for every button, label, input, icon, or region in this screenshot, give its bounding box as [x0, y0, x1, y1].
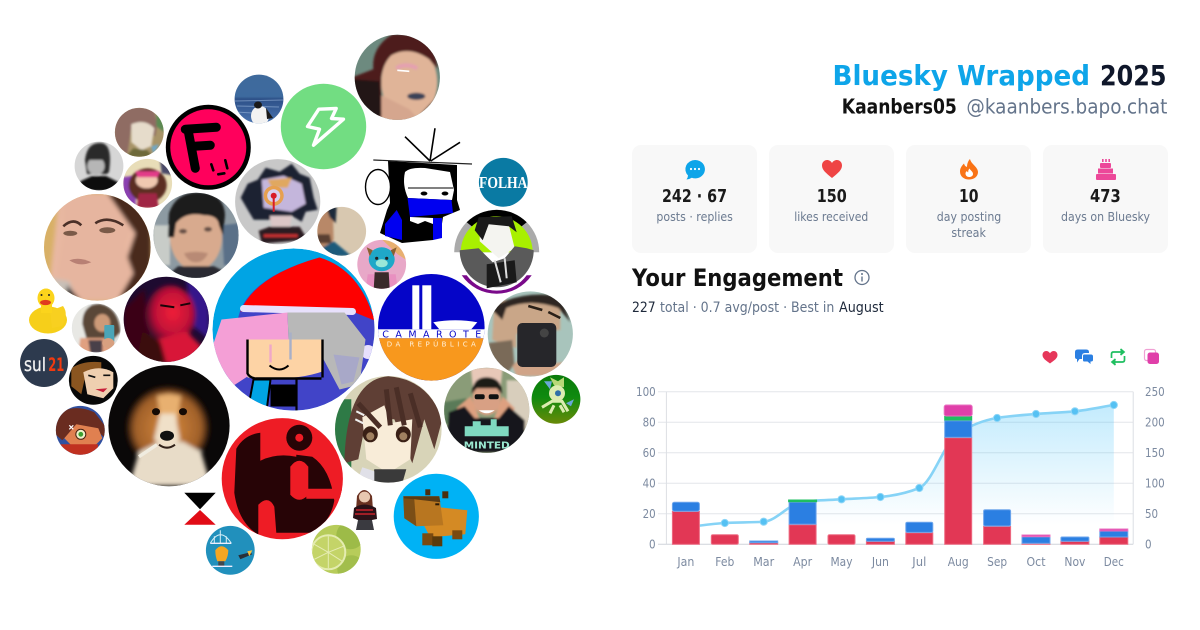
icon: birthday cake — [1096, 159, 1116, 180]
avatar: lime slices — [312, 524, 361, 574]
panel: days on Bluesky stat: 473 — [1090, 186, 1121, 207]
avatar: snoopy at sea — [234, 74, 284, 126]
avatar: Camarote da Republica logo: DA REPÚBLICA — [387, 340, 476, 349]
left axis labels — [636, 385, 656, 551]
left axis labels: 20 — [643, 507, 656, 521]
icon: likes — [1042, 351, 1058, 364]
month labels: Jan — [676, 555, 694, 569]
avatar: Folha logo — [479, 158, 528, 207]
icon: replies — [1075, 350, 1093, 364]
avatar: man with child on shoulders, MINTED shirt: MINTED — [464, 440, 510, 451]
avatar: celebi sprite — [531, 374, 581, 424]
avatar: pink F logo — [166, 105, 251, 190]
right axis labels: 100 — [1145, 476, 1165, 490]
avatar: sul21 logo — [20, 339, 68, 387]
avatar: girl with green eye — [55, 405, 105, 455]
avatar: man with child on shoulders, MINTED shirt — [444, 367, 532, 453]
left axis labels: 0 — [649, 537, 656, 551]
avatar: woman with dark lipstick — [354, 34, 440, 120]
avatar: red logo with black letters — [221, 418, 343, 540]
avatar: black and white portrait — [74, 141, 124, 191]
icon: flame — [960, 159, 978, 180]
avatar: hand-drawn masked figure — [366, 128, 472, 243]
avatar: blue tiger character — [357, 239, 407, 289]
right axis labels: 150 — [1145, 446, 1165, 460]
avatar: anime brown hair — [114, 107, 164, 157]
user handle line: @kaanbers.bapo.chat — [966, 94, 1168, 118]
avatar: mirror selfie — [71, 303, 121, 353]
left axis labels: 80 — [643, 415, 656, 429]
icon: quotes — [1144, 350, 1159, 364]
panel: likes received stat: likes received — [794, 209, 868, 224]
month labels: Jun — [871, 555, 889, 569]
avatar: manga girl on lime background — [454, 210, 539, 295]
avatar: woman in red light — [123, 276, 209, 364]
avatar: young man — [153, 192, 239, 280]
user handle line: Kaanbers05 — [842, 94, 957, 118]
month labels: Feb — [715, 555, 734, 569]
month labels — [676, 555, 1124, 569]
avatar: sul21 logo: 21 — [48, 354, 64, 376]
avatar: sheltie dog with cigarette — [108, 365, 230, 487]
left axis labels: 60 — [643, 446, 656, 460]
avatar: rubber duck — [29, 288, 67, 334]
panel: day posting streak stat: streak — [951, 225, 987, 240]
heading: Your Engagement: Your Engagement — [631, 264, 843, 292]
avatar: woman close-up — [43, 193, 151, 301]
right axis labels — [1145, 385, 1165, 551]
month labels: Mar — [753, 555, 774, 569]
month labels: Oct — [1026, 555, 1046, 569]
avatar: man with phone mirror selfie — [487, 291, 573, 377]
left axis labels: 100 — [636, 385, 656, 399]
title: Bluesky Wrapped — [832, 59, 1090, 92]
grid lines — [658, 392, 1133, 544]
avatar: comic woman — [68, 355, 118, 405]
user handle line — [842, 94, 1168, 118]
month labels: Sep — [987, 555, 1007, 569]
icon: info — [855, 270, 869, 284]
avatar: sul21 logo: sul — [24, 354, 46, 376]
engagement summary text: August — [839, 300, 884, 316]
panel: days on Bluesky stat: days on Bluesky — [1061, 209, 1151, 224]
stacked bars — [672, 405, 1128, 544]
month labels: May — [830, 555, 852, 569]
panel: likes received stat: 150 — [817, 186, 847, 207]
cumulative line — [686, 405, 1114, 527]
avatar: chibi girl sprite — [353, 490, 377, 530]
avatar: santa hat character, largest bubble — [212, 248, 376, 412]
panel: day posting streak stat: day posting — [937, 209, 1001, 224]
chart legend icons — [1042, 349, 1159, 365]
avatar: Camarote da Republica logo: CAMAROTE — [382, 329, 481, 340]
panel: avatar bubble cluster — [20, 34, 581, 583]
icon: reposts — [1112, 349, 1124, 365]
cumulative area — [686, 405, 1114, 544]
avatar: Folha logo: FOLHA — [479, 173, 528, 192]
avatar: gray anime character — [235, 159, 321, 245]
avatar: side-view man by brick wall — [317, 206, 367, 256]
avatar: green lightning bolt — [281, 84, 366, 169]
panel: day posting streak stat — [906, 145, 1031, 253]
engagement summary text: total · 0.7 avg/post · Best in — [660, 300, 834, 316]
right axis labels: 200 — [1145, 415, 1165, 429]
panel: day posting streak stat: 10 — [959, 186, 978, 207]
month labels: Jul — [911, 555, 926, 569]
month labels: Nov — [1064, 555, 1085, 569]
avatar: Camarote da Republica logo — [377, 273, 485, 382]
month labels: Aug — [948, 555, 969, 569]
month labels: Dec — [1104, 555, 1124, 569]
right axis labels: 50 — [1145, 507, 1158, 521]
left axis labels: 40 — [643, 476, 656, 490]
panel: likes received stat — [769, 145, 894, 253]
panel: posts and replies stat: posts · replies — [656, 209, 733, 224]
month labels: Apr — [793, 555, 812, 569]
avatar: curly illustrated character — [123, 158, 173, 208]
avatar: anime girl — [334, 375, 442, 483]
icon: chat bubble — [685, 160, 705, 180]
avatar: capybara — [393, 473, 479, 559]
panel: posts and replies stat — [632, 145, 757, 253]
avatar: lightbulb illustration — [205, 525, 255, 575]
icon: red heart — [822, 160, 842, 178]
icon: hourglass logo — [184, 493, 216, 525]
title: 2025 — [1100, 59, 1166, 92]
line points — [721, 401, 1117, 527]
right axis labels: 250 — [1145, 385, 1165, 399]
panel: days on Bluesky stat — [1043, 145, 1168, 253]
panel: posts and replies stat: 242 · 67 — [662, 186, 727, 207]
engagement summary text: 227 — [632, 300, 656, 316]
right axis labels: 0 — [1145, 537, 1152, 551]
chart: monthly engagement stacked bars with cumulative line — [636, 385, 1165, 569]
